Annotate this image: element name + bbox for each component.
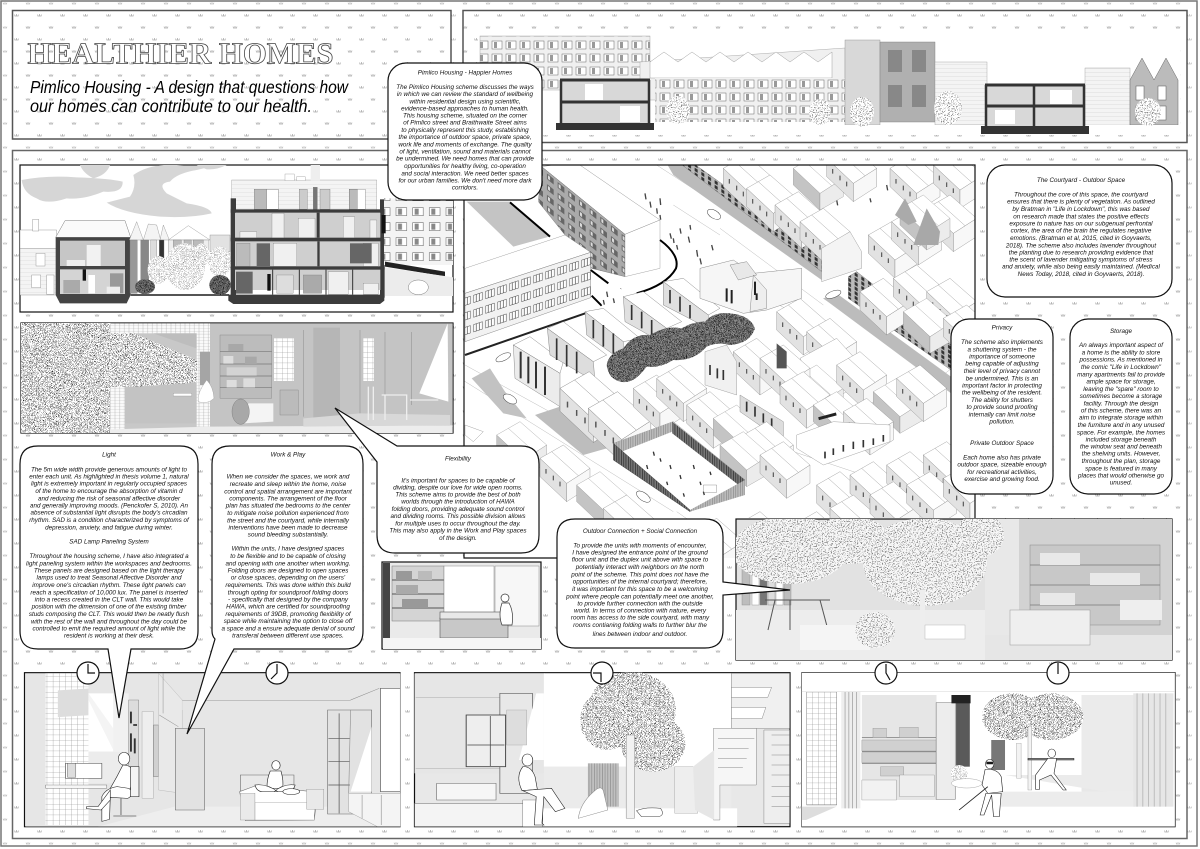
icon: clock 1 [77,662,99,684]
body text: of this scheme, there was an [1081,408,1162,415]
figure: person with cane [959,759,1003,817]
callout: Outdoor Connection + Social Connection [557,519,790,648]
body text: to mitigate noise pollution experienced from [227,510,349,517]
body text: exposure to nature has on our subgenual perfrontal [1009,220,1153,227]
callout: Flexibility [335,408,539,553]
body text: This scheme aims to provide the best of both [395,492,521,499]
body text: Folding doors are designed to open spaces [228,568,349,575]
body text: important factor in protecting [962,382,1042,389]
body text: for our urban families. We don't need more dark [398,178,532,185]
body text: rooms contianing folding walls to further blur the [573,622,707,629]
body text: - specifically that designed by the company [228,596,349,603]
body text: The scheme also implements [961,339,1044,346]
body text: sound bleeding substantially. [248,532,328,539]
body text: This housing scheme, situated on the corner [403,113,528,120]
body text: many apartments fail to provide [1077,371,1165,378]
body text: transferal between different use spaces. [232,633,344,640]
body text: reach a specification of 10,000 lux. The panel is inserted [30,589,188,596]
body text: evidence-based approaches to human health. [401,105,529,112]
body text: into a recess created in the CLT wall. This would take [35,596,184,603]
heading: Storage [1110,328,1133,335]
body text: point where people can potentially meet one another, [565,593,714,600]
body text [221,474,355,640]
body text: potentially interact with neighbors on the north [575,564,705,571]
body text: within residential design using scientific, [409,98,521,105]
body text: and reducing the risk of seasonal affective disorder [38,495,181,502]
body text: recreate and sleep within the home, noise [230,481,347,488]
body text: world. In terms of connection with nature, every [574,608,707,615]
body text: exercise and growing food. [964,476,1040,483]
heading: Work & Play [271,452,306,459]
body text: control and spatial arrangement are important [224,488,352,495]
body text: point of the scheme. This point does not have the [570,571,709,578]
heading: Outdoor Connection + Social Connection [583,528,698,535]
body text: corridors. [452,185,478,192]
body text: resident is working at their desk. [64,633,154,640]
heading: Privacy [992,324,1013,331]
body text: and dividing rooms. This possible division allows [390,513,526,520]
icon: clock 4 [875,662,897,684]
body text: Throughout the core of this space, the courtyard [1014,191,1149,198]
body text: work life and moments of exchange. The quality [398,141,533,148]
body text: The ability for shutters [971,397,1034,404]
body text: components. The arrangement of the floor [229,496,348,503]
body text: the furniture and in any unused [1078,422,1165,429]
drawing: outdoor connection view [732,513,1172,660]
body text: places that would otherwise go [1077,473,1165,480]
body text: enter each unit. As highlighted in thesis volume 1, natural [29,474,189,481]
drawing: bottom room views [24,672,1175,827]
callout: Storage [1070,319,1172,494]
body text [1002,191,1160,278]
body text: depression, anxiety, and fatigue during winter. [45,524,173,531]
body text: interventions have been made to decrease [228,524,348,531]
body text: floor unit and the duplex unit above with space to [572,557,709,564]
panel: street elevation strip [463,10,1187,142]
body text [1077,342,1166,487]
body text: sometimes become a storage [1080,393,1163,400]
drawing: isometric aerial view [463,164,976,559]
body text: requirements. This was done within this build [225,582,351,589]
body text: on research made that states the positive effects [1013,213,1150,220]
heading: Flexibility [445,455,472,462]
body text: 2018). The scheme also includes lavender throughout [1005,242,1156,249]
body text: aim to integrate storage within [1079,415,1163,422]
body text: of the home to encourage the absorption of vitamin d [35,488,183,495]
body text: space while maintaining the option to close off [224,618,353,625]
body text: studs composing the CLT. This would then be neatly flush [29,611,190,618]
body text [389,477,527,542]
body text: with the rest of the wall and throughout the day could be [31,618,188,625]
body text: controlled to emit the required amount of light while the [33,625,186,632]
body text: When we consider the spaces, we work and [227,474,350,481]
body text: the importance of outdoor space, private space, [398,134,532,141]
body text: cortex, the area of the brain the regulates negative [1011,228,1152,235]
body text: opportunities for healthy living, co-operation [404,163,526,170]
body text: the wellbeing of the resident. [962,390,1042,397]
body text: This may also apply in the Work and Play spaces [389,528,527,535]
body text: lines between indoor and outdoor. [593,631,687,638]
heading: Healthier Homes: HEALTHIER HOMES [28,36,334,70]
drawing: interior view with tree [21,323,453,433]
body text: importance of someone [969,354,1035,361]
body text: position with the dimension of one of the existing timber [31,604,187,611]
icon: clock 2 [266,662,288,684]
body text: An always important aspect of [1078,342,1164,349]
drawing: small living room view [382,562,541,649]
body text: by Bratman in "Life in Lockdown", this was based [1012,206,1150,213]
body text: absence of substantial light disrupts the body's circadian [31,510,188,517]
figure: child crouching [578,788,608,818]
body text: the shelving units. However, [1082,451,1160,458]
drawing: street section [478,30,1180,135]
body text [26,466,192,640]
body text: These panels are designed based on the light therapy [34,567,185,574]
body text: The Pimlico Housing scheme discusses the ways [396,84,535,91]
body text: the comic "Life in Lockdown" [1081,364,1162,371]
drawing: long section through housing [20,165,453,312]
icon: clock 5 [1047,662,1069,684]
body text: requirements of 39DB, promoting flexibility of [225,611,352,618]
heading: Light [102,452,116,459]
body text [565,542,714,638]
body text: possessions. As mentioned in [1078,357,1163,364]
body text: it was important for this space to be a welcoming [572,586,708,593]
body text: the window seat and beneath [1080,444,1162,451]
body text: to be flexible and to be capable of closing [230,553,346,560]
panel: main content background [12,150,1187,838]
callout: The Courtyard - Outdoor Space [987,165,1172,297]
room: courtyard with tree [415,672,790,827]
body text: ample space for storage, [1086,379,1156,386]
body text: facility. Through the design [1084,400,1159,407]
subtitle: Pimlico Housing - A design that questions how [30,77,349,97]
body text: lamps used to treat Seasonal Affective Disorder and [36,575,182,582]
body text: space. For example, the homes [1077,429,1166,436]
body text: pollution. [988,419,1015,426]
body text: included storage beneath [1086,436,1157,443]
subtitle: our homes can contribute to our health. [30,96,312,116]
body text: of the design. [439,535,477,542]
callout: Work and Play [187,446,363,734]
body text: News Today, 2018, cited in Goyvaerts, 2018). [1018,271,1144,278]
body text: through opting for soundproof folding doors [228,589,349,596]
body text: the planting due to research providing evidence that [1009,249,1154,256]
body text: leaving the "spare" room to [1083,386,1159,393]
body text: It's important for spaces to be capable of [401,477,516,484]
body text: in which we can review the standard of wellbeing [397,91,534,98]
body text: their level of privacy cannot [964,368,1040,375]
body text: opportunities of the internal courtyard; therefore, [573,579,707,586]
figure: person in yoga pose [1028,749,1074,790]
body text: for recreational activities, [967,469,1037,476]
callout: Pimlico Housing - Happier Homes [388,63,542,200]
body text: room has access to the side courtyard, with many [571,615,710,622]
body text: to provide further connection with the outside [577,600,703,607]
body text: The 5m wide width provide generous amounts of light to [31,466,188,473]
body text: for multiple uses to occur throughout the day. [395,520,521,527]
callout: Privacy and Private Outdoor Space [951,319,1053,494]
figure: cat [636,808,662,817]
body text: folding doors, providing adequate sound control [392,506,525,513]
body text: the street and the courtyard, while internally [227,517,350,524]
body text: being capable of adjusting [965,361,1039,368]
body text [396,84,535,192]
body text: ensures that there is plenty of vegetation. As outlined [1007,199,1155,206]
body text: and opening with one another when working. [226,560,350,567]
body text: Within the units, I have designed spaces [232,546,345,553]
body text: Each home also has private [963,454,1041,461]
body text: space is featured in many [1085,465,1158,472]
body text: light is extremely important in regularly occupied spaces [31,481,188,488]
body text: HAWA, which are certified for soundproofing [226,604,350,611]
body text: internally can limit noise [969,411,1036,418]
callout: Light and SAD Lamp Paneling System [20,446,198,718]
body text: plan has situated the bedrooms to the center [225,503,351,510]
room: library opening to garden [802,673,1175,827]
body text: I have designed the entrance point of the ground [572,550,708,557]
subtitle [30,77,349,116]
body text: throughout the plan, storage [1082,458,1161,465]
body text: be undermined. We need homes that can provide [396,156,534,163]
body text: and social interaction. We need better spaces [401,170,529,177]
body text: be undermined. This is an [966,375,1039,382]
body text: to physically represent this study, establishing [401,127,529,134]
body text: the scent of lavender mitigating symptoms of stress [1009,257,1153,264]
body text: of Pimlico street and Braithwaite Street aims [403,120,528,127]
body text: and generally improving moods. (Penckofer S, 2010). An [30,502,188,509]
body text: a space and a ensure adequate denial of sound [221,625,355,632]
body text: and anxiety, while also being easily maintained. (Medical [1002,264,1160,271]
body text: of light, ventilation, sound and materials cannot [399,149,531,156]
body text: To provide the units with moments of encounter, [573,542,707,549]
body text: or close spaces, depending on the users' [231,575,346,582]
figure: person on bed [255,761,300,795]
body text: outdoor space, sizeable enough [957,462,1047,469]
body text: improve one's circadian rhythm. These light panels can [32,582,186,589]
body text: worlds through the introduction of HAWA [401,499,515,506]
figure: woman on bench [519,754,565,825]
body text: SAD Lamp Paneling System [69,539,149,546]
body text: Throughout the housing scheme, I have also integrated a [29,553,189,560]
icon: clock 3 [591,662,613,684]
heading: Pimlico Housing - Happier Homes [418,69,513,76]
body text: dividing, despite our love for wide open rooms. [393,484,523,491]
body text: emotions. (Bratman et al, 2015, cited in Goyvaerts, [1010,235,1152,242]
body text: unused. [1110,480,1132,487]
body text: a shuttering system - the [968,346,1037,353]
room: home office and bedroom [25,673,400,827]
body text: to provide sound proofing [966,404,1038,411]
figure: woman at desk [87,752,139,821]
heading: The Courtyard - Outdoor Space [1037,177,1126,184]
body text: rhythm. SAD is a condition characterized by symptoms of [29,517,190,524]
body text: light paneling system within the workspaces and bedrooms. [26,560,192,567]
body text [957,339,1047,483]
body text: a home is the ability to store [1082,349,1161,356]
body text: Private Outdoor Space [970,440,1034,447]
panel: title [12,10,451,139]
